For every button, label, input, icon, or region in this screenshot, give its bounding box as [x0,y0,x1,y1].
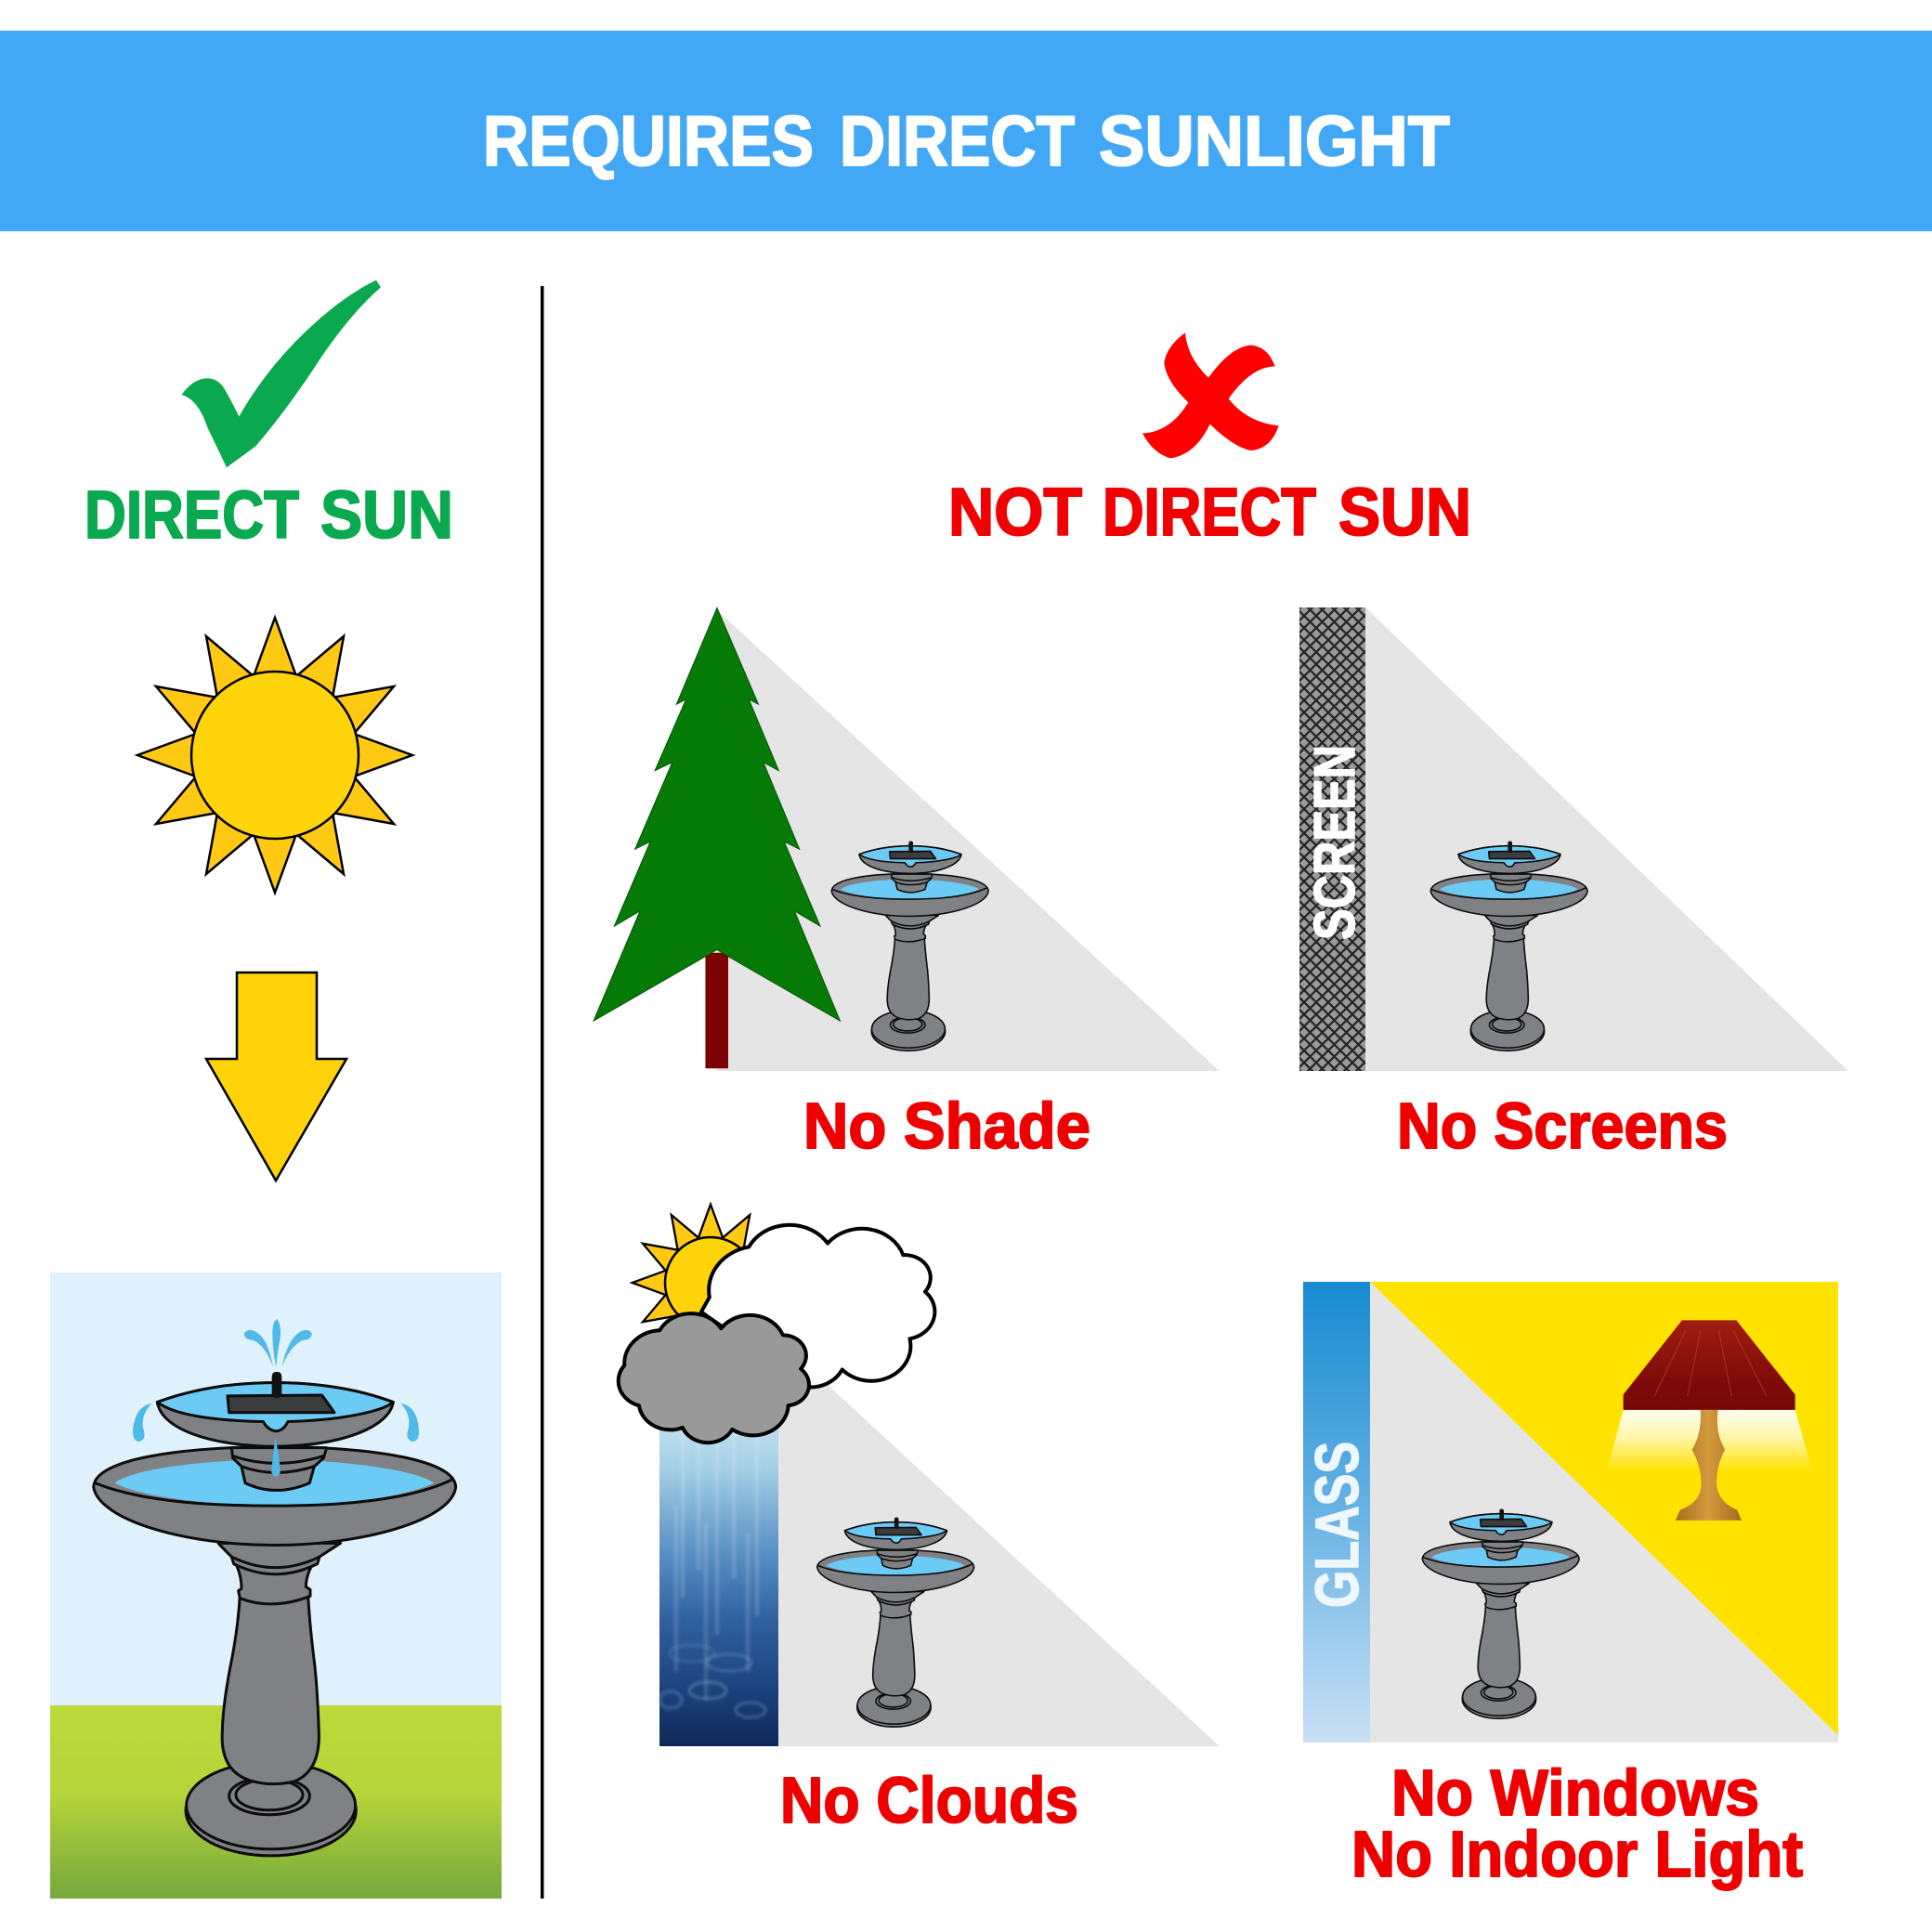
icon: small sun [633,1205,789,1361]
icon: small fountain [1430,842,1587,1051]
panel: no screens [1299,607,1848,1162]
heading: not direct sun: DIRECT [1103,476,1316,550]
glass strip [1303,1282,1370,1743]
panel: no windows or indoor light [1302,1282,1838,1890]
scene: fountain in direct sun [50,1273,502,1899]
icon: white cloud [701,1225,934,1387]
screen label: SCREEN [1303,745,1367,940]
icon: small fountain [831,842,988,1051]
icon: grey cloud [619,1313,809,1442]
icon: pine tree [594,607,841,1068]
shadow triangle [717,610,1220,1071]
panel: not direct sun heading [948,333,1471,550]
heading: direct sun: DIRECT [85,478,299,553]
label: no shade: No Shade [803,1090,1090,1162]
panel: no clouds [619,1205,1220,1836]
panel: direct sun [50,281,502,1899]
icon: water jets [133,1319,419,1477]
heading: not direct sun: NOT [948,476,1082,550]
icon: small fountain [1422,1509,1579,1718]
label: no clouds: No Clouds [780,1764,1078,1836]
label: no indoor light: No Indoor Light [1351,1818,1803,1890]
label: no screens: No Screens [1397,1090,1728,1162]
icon: red x mark [1142,333,1279,458]
shadow area [1370,1282,1838,1743]
label: no windows: No Windows [1391,1756,1759,1829]
shadow triangle [1365,607,1848,1071]
screen strip [1299,607,1365,1071]
glass label: GLASS [1302,1442,1371,1608]
title text: SUNLIGHT [1099,102,1450,181]
icon: green check mark [182,281,381,467]
icon: small fountain [817,1518,974,1727]
shadow triangle [778,1339,1220,1746]
divider line [541,286,544,1899]
title text: DIRECT [840,102,1075,181]
panel: no shade [594,607,1220,1162]
heading: not direct sun: SUN [1338,476,1471,550]
rain column [659,1416,778,1746]
arrow: sunlight pointing down [206,973,346,1181]
icon: table lamp [1607,1320,1812,1521]
icon: sun [137,618,412,893]
title banner [0,31,1932,231]
heading: direct sun: SUN [320,478,453,553]
yellow indoor light triangle [1370,1282,1838,1735]
title text: REQUIRES [483,102,814,181]
